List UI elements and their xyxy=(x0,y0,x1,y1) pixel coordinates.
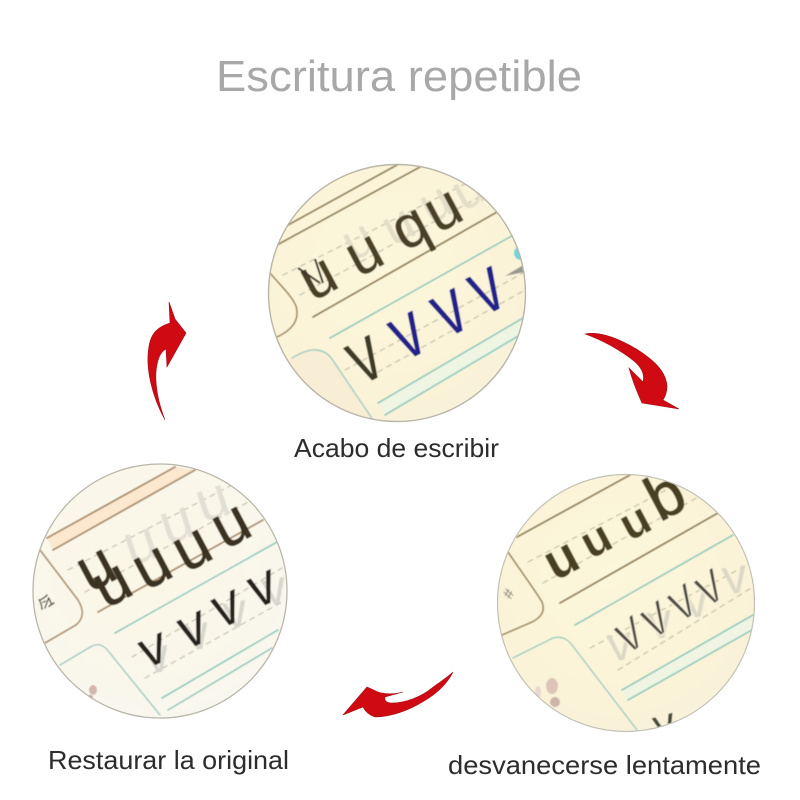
redrawn u letters: u xyxy=(80,544,143,621)
illustration remnant xyxy=(87,685,97,699)
panel: fading slowly circle xyxy=(496,474,756,732)
label: restore original: Restaurar la original xyxy=(48,745,289,775)
ghost v letters: v xyxy=(141,629,174,685)
handwritten letters u u qu: u xyxy=(287,238,348,313)
handwritten letters u u qu: u xyxy=(412,170,473,245)
dark v: v xyxy=(330,308,397,402)
title: Escritura repetible xyxy=(216,52,582,101)
printed character: 令 xyxy=(35,591,59,615)
ghost v letters xyxy=(147,577,284,672)
redrawn u letters: u xyxy=(120,526,183,603)
redrawn v letters xyxy=(136,568,272,666)
faded v letters: v xyxy=(628,578,679,653)
ghost u letters: u xyxy=(409,171,461,235)
thin pen strokes over first u xyxy=(298,259,323,283)
ghost u letters: u xyxy=(151,486,201,557)
redrawn u letters: u xyxy=(199,485,262,562)
arrow: left to top xyxy=(148,302,186,420)
ghost u letters: u xyxy=(332,208,384,272)
printed character: # xyxy=(500,586,519,602)
ghost v letters: v xyxy=(679,571,712,630)
arrow: top to right xyxy=(585,333,679,409)
blue v letters: v xyxy=(373,284,440,378)
label: just written: Acabo de escribir xyxy=(294,433,499,463)
bold letters u u u b xyxy=(544,477,685,578)
redrawn v letters: v xyxy=(169,590,215,664)
redrawn v letters: v xyxy=(131,614,174,681)
ghost u letters: u xyxy=(442,158,494,222)
teal band xyxy=(622,615,753,700)
peach box xyxy=(260,350,373,425)
faded v letters: v xyxy=(655,561,706,636)
bold letters u u u b: u xyxy=(571,509,620,568)
ghost v letters: v xyxy=(718,547,751,606)
bold letters u u u b: b xyxy=(634,457,697,534)
illustration remnant xyxy=(535,678,560,707)
handwritten letters u u qu xyxy=(300,192,464,298)
teal band xyxy=(379,320,522,414)
ghost v letters: v xyxy=(181,606,214,662)
ghost v letters: v xyxy=(258,561,291,617)
orange band xyxy=(47,467,195,550)
ghost v letters xyxy=(606,565,745,660)
handwritten letters u u qu: q xyxy=(379,188,440,263)
blue v letters: v xyxy=(415,261,482,355)
blue v letters xyxy=(386,265,500,357)
redrawn u letters xyxy=(77,506,252,606)
label: slowly fade: desvanecerse lentamente xyxy=(448,750,761,780)
ghost u letters: u xyxy=(372,193,424,257)
ghost u letters xyxy=(124,485,229,563)
panel: restored circle xyxy=(33,464,291,718)
bold letters u u u b: u xyxy=(610,491,659,550)
faded v letters: v xyxy=(682,546,733,621)
faded v letters: v xyxy=(602,593,653,668)
redrawn v letters: v xyxy=(239,549,285,623)
arrow: right to left xyxy=(343,672,453,717)
handwritten letters u u qu: u xyxy=(333,214,394,289)
icon: pen tip xyxy=(506,247,524,276)
ghost u letters xyxy=(344,184,485,258)
faded v letters xyxy=(614,568,719,650)
bold letters u u u b: u xyxy=(533,526,589,592)
blue v letters: v xyxy=(452,239,519,333)
partial v at bottom: v xyxy=(647,697,681,751)
ghost v letters: v xyxy=(643,592,676,651)
ghost v letters: v xyxy=(219,584,252,640)
redrawn v letters: v xyxy=(203,569,249,643)
ghost u letters: u xyxy=(187,464,237,535)
ghost v letters: v xyxy=(603,614,636,673)
redrawn u letters: u xyxy=(160,508,223,585)
panel: just written circle xyxy=(260,158,530,425)
ghost u letters: u xyxy=(115,507,165,578)
redrawn u letters: u xyxy=(64,528,127,605)
